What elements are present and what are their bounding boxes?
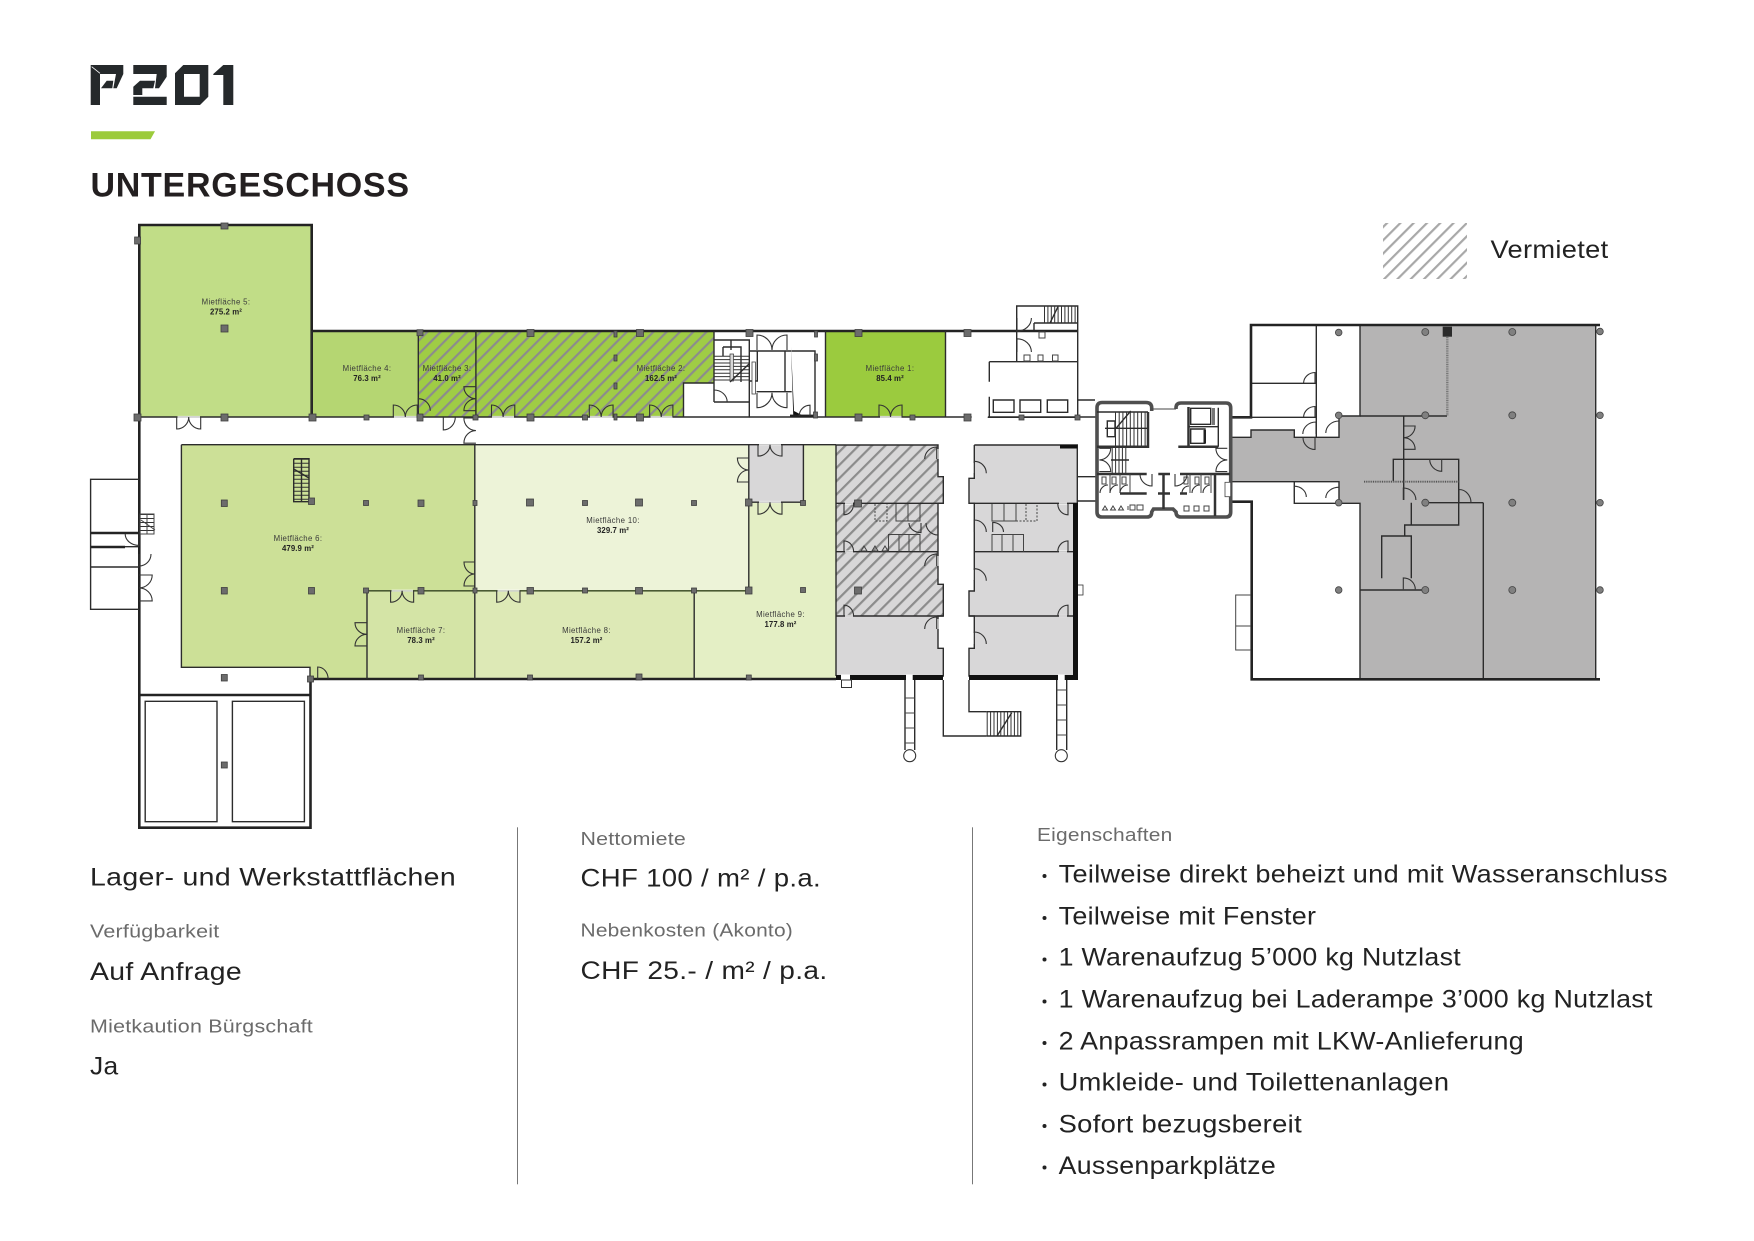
panel: rental area 8: Mietfläche 8: <box>562 626 611 635</box>
panel: service rooms right block <box>969 445 1083 677</box>
panel: rental area 4 <box>312 331 418 417</box>
floor plan <box>91 223 1603 828</box>
panel: rental area 7: 78.3 m² <box>407 636 435 645</box>
stairs <box>140 307 1078 736</box>
panel: rental area 4: Mietfläche 4: <box>343 364 391 373</box>
text block: left column: Mietkaution Bürgschaft <box>90 1016 314 1037</box>
text block: properties list: Umkleide- und Toilettenanlagen <box>1059 1069 1449 1097</box>
text block: properties list: 2 Anpassrampen mit LKW-Anlieferung <box>1059 1027 1524 1055</box>
panel: rental area 6 <box>181 445 475 679</box>
logo: F201 <box>91 65 233 105</box>
panel: rental area 5 <box>139 225 312 417</box>
loading ramps <box>904 680 1067 762</box>
panel: tenant grey hall right <box>1231 325 1600 679</box>
panel: rental area 6: Mietfläche 6: <box>274 534 322 543</box>
panel: rental area 9: Mietfläche 9: <box>756 610 805 619</box>
building walls <box>91 225 1096 828</box>
panel: rental area 3 rented: 41.0 m² <box>433 374 461 383</box>
panel: rental area 1: 85.4 m² <box>876 374 904 383</box>
panel: rental area 10: Mietfläche 10: <box>586 516 640 525</box>
panel: rental area 7: Mietfläche 7: <box>397 626 445 635</box>
round columns right hall <box>1335 328 1603 594</box>
text block: properties list: Teilweise mit Fenster <box>1059 902 1316 930</box>
panel: rental area 10 <box>475 445 749 591</box>
text block: properties list: 1 Warenaufzug 5’000 kg Nutzlast <box>1059 944 1461 972</box>
panel: rental area 7 <box>367 591 475 679</box>
legend: Vermietet <box>1383 223 1608 279</box>
text block: properties list: 1 Warenaufzug bei Laderampe 3’000 kg Nutzlast <box>1059 986 1653 1014</box>
text block: left column: Lager- und Werkstattflächen <box>90 864 456 892</box>
door gaps in walls <box>178 417 1067 644</box>
panel: rental area 5: Mietfläche 5: <box>202 298 250 306</box>
panel: rental area 1 <box>826 331 946 417</box>
panel: rental area 2 rented <box>476 331 714 417</box>
text block: properties list: Aussenparkplätze <box>1059 1152 1276 1180</box>
lift and stair core <box>714 331 815 417</box>
stair and toilet core <box>1097 402 1231 517</box>
text block: properties list: Teilweise direkt beheizt und mit Wasseranschluss <box>1059 860 1668 888</box>
text block: middle column: CHF 25.- / m² / p.a. <box>580 957 828 985</box>
heading: UNTERGESCHOSS: UNTERGESCHOSS <box>90 167 409 205</box>
panel: rental area 2 rented: Mietfläche 2: <box>637 364 685 373</box>
text block: middle column: Nebenkosten (Akonto) <box>580 920 793 941</box>
text block: properties list <box>1037 824 1668 1180</box>
panel: rental area 2 rented: 162.5 m² <box>645 374 677 383</box>
text block: left column <box>90 864 456 1080</box>
legend: Vermietet: Vermietet <box>1490 236 1608 264</box>
doors <box>125 318 1471 679</box>
panel: rental area 3 rented <box>418 331 476 417</box>
text block: left column: Ja <box>90 1052 118 1080</box>
text block: middle column: CHF 100 / m² / p.a. <box>580 865 821 893</box>
accent bar <box>91 131 155 139</box>
text block: middle column: Nettomiete <box>580 828 686 849</box>
text block: left column: Verfügbarkeit <box>90 921 220 942</box>
panel: rental area 1: Mietfläche 1: <box>866 364 914 373</box>
panel: rental area 9: 177.8 m² <box>764 620 797 629</box>
text block: left column: Auf Anfrage <box>90 958 242 986</box>
panel: rental area 9 <box>694 445 836 679</box>
panel: rental area 3 rented: Mietfläche 3: <box>423 364 471 373</box>
divider left <box>517 827 518 1184</box>
panel: rental area 10: 329.7 m² <box>597 526 629 535</box>
divider right <box>972 827 973 1184</box>
text block: properties list: Eigenschaften <box>1037 824 1172 845</box>
panel: service rooms left block <box>836 445 943 677</box>
text block: middle column <box>580 828 828 985</box>
panel: rental area 8: 157.2 m² <box>570 636 603 645</box>
panel: rental area 5: 275.2 m² <box>210 308 242 316</box>
panel: rental area 4: 76.3 m² <box>353 374 381 383</box>
building columns <box>134 223 1080 768</box>
text block: properties list: Sofort bezugsbereit <box>1059 1110 1302 1138</box>
panel: rental area 6: 479.9 m² <box>282 544 314 553</box>
panel: rental area 8 <box>475 591 694 679</box>
